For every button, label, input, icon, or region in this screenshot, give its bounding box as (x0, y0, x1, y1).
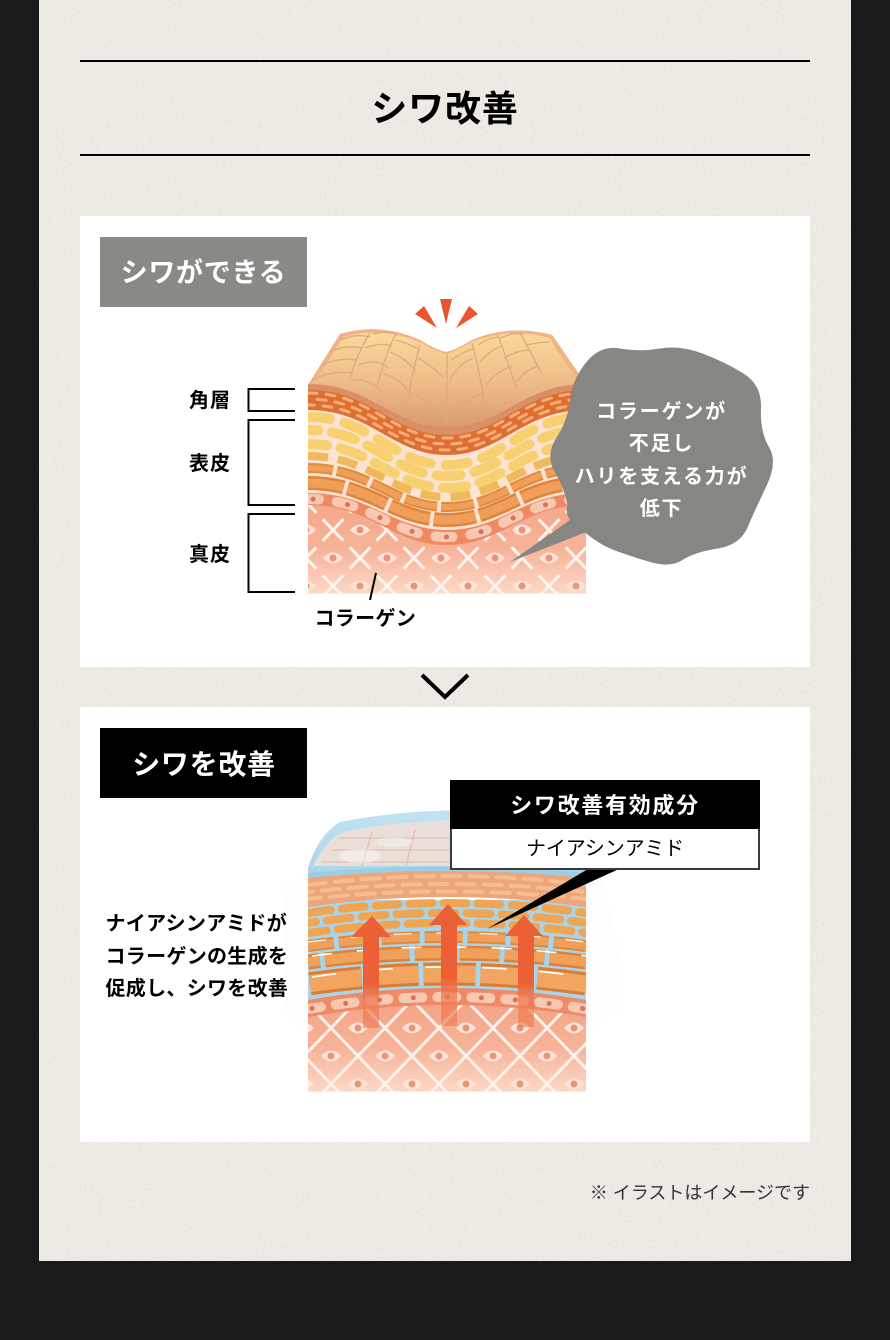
callout text: コラーゲンが (596, 401, 727, 423)
heading: wrinkle forms: シワができる (121, 258, 286, 288)
basal layer (308, 988, 586, 1017)
callout text: ハリを支える力が (575, 466, 748, 488)
skin illustration: wrinkled (308, 299, 586, 600)
stratum corneum (308, 390, 572, 455)
title block: シワ改善 (371, 88, 519, 129)
label: collagen: コラーゲン (314, 608, 416, 630)
icon: red alert spark (415, 299, 478, 328)
label: dermis: 真皮 (189, 544, 231, 566)
label: epidermis: 表皮 (189, 453, 231, 475)
dermis (308, 505, 586, 594)
callout text: 低下 (640, 498, 683, 520)
small orange layer (308, 871, 586, 907)
gel layer (308, 810, 586, 880)
arrow: upward center (429, 904, 467, 1026)
callout header: シワ改善有効成分 (510, 793, 700, 818)
explanatory text: 促成し、シワを改善 (106, 978, 288, 1000)
arrow: upward right (505, 915, 543, 1027)
basal layer (308, 493, 568, 545)
epidermis background (308, 410, 568, 530)
yellow cells (308, 417, 586, 497)
skin surface (308, 329, 586, 435)
skin illustration: improved (308, 810, 617, 1092)
explanatory text (106, 912, 288, 1000)
panel: wrinkle improvement (80, 707, 810, 1142)
orange epidermis cells (308, 903, 586, 984)
orange brick cells (308, 468, 586, 520)
arrow: upward left (351, 916, 391, 1028)
heading: wrinkle improvement (100, 728, 307, 798)
callout pointer (487, 869, 619, 929)
arrow: chevron down (420, 674, 470, 700)
panel: wrinkle forms (80, 216, 810, 667)
epidermis blue matrix (308, 900, 586, 1001)
layer brackets (248, 388, 295, 593)
soft glow (284, 880, 622, 1030)
callout text (575, 400, 748, 520)
explanatory text: コラーゲンの生成を (106, 946, 288, 968)
footnote: ※ イラストはイメージです (590, 1183, 810, 1203)
heading: wrinkle forms (100, 237, 307, 307)
callout ingredient name: ナイアシンアミド (526, 838, 684, 860)
ingredient callout (450, 780, 760, 870)
callout bubble shape (510, 348, 773, 565)
heading: wrinkle improvement: シワを改善 (132, 749, 276, 780)
dermis (308, 1005, 586, 1092)
callout text: 不足し (629, 433, 694, 455)
collagen leader line (370, 573, 376, 600)
explanatory text: ナイアシンアミドが (106, 913, 287, 935)
title block (80, 60, 810, 156)
callout header (450, 780, 760, 829)
label: stratum corneum: 角層 (189, 390, 231, 412)
